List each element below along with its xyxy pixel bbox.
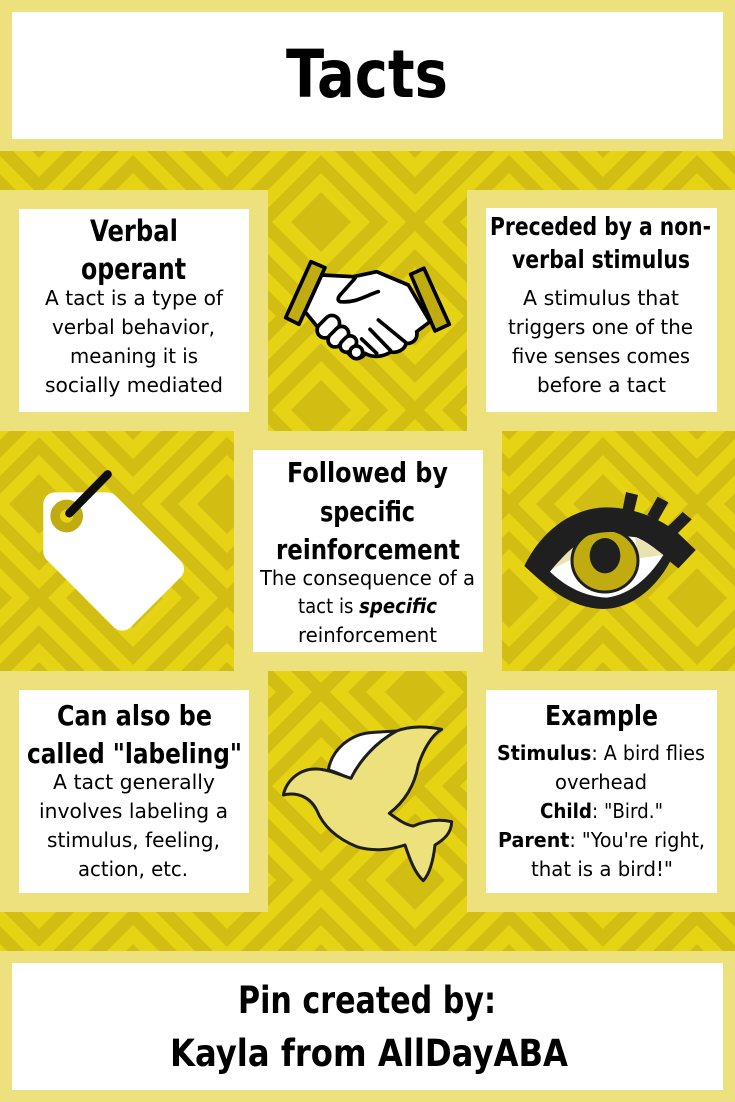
text: followed description: [259, 566, 475, 647]
heading: verbal operant: operant: [81, 252, 186, 286]
heading: example: Example: [545, 699, 658, 732]
heading: verbal operant: Verbal: [90, 214, 178, 248]
text: followed description: tact is specific: [298, 594, 437, 618]
icon: price tag: [50, 474, 172, 619]
text: preceded description: [508, 286, 693, 397]
text: verbal operant description: meaning it is: [70, 344, 198, 368]
text: followed description: reinforcement: [298, 623, 437, 647]
text: verbal operant description: verbal behavior,: [52, 315, 215, 339]
title: Tacts: [286, 36, 448, 113]
text: example dialogue: Stimulus: A bird flies: [497, 741, 705, 765]
text: example dialogue: that is a bird!": [531, 857, 673, 881]
heading: preceded by a non-verbal stimulus: [490, 212, 711, 274]
icon: bird: [283, 727, 452, 881]
heading: followed by specific reinforcement: [276, 456, 460, 566]
panel: followed by specific reinforcement: [234, 431, 502, 671]
panel: example: [467, 671, 735, 912]
text: labeling description: A tact generally: [53, 770, 215, 794]
text: followed description: The consequence of a: [259, 566, 475, 590]
heading: can also be called labeling: Can also be: [57, 699, 212, 732]
text: labeling description: involves labeling a: [39, 799, 228, 823]
icon: handshake: [286, 262, 449, 359]
panel: preceded by a non-verbal stimulus: [467, 190, 735, 431]
footer credit text: Kayla from AllDayABA: [170, 1032, 568, 1075]
footer credit text: Pin created by:: [238, 979, 496, 1022]
heading: can also be called labeling: called "labeling": [27, 737, 242, 770]
text: verbal operant description: A tact is a type of: [45, 286, 224, 310]
text: labeling description: action, etc.: [78, 857, 188, 881]
text: example dialogue: Child: "Bird.": [540, 799, 663, 823]
heading: verbal operant: [81, 214, 186, 286]
text: preceded description: triggers one of the: [508, 315, 693, 339]
text: example dialogue: Parent: "You're right,: [498, 828, 705, 852]
text: example dialogue: overhead: [555, 770, 647, 794]
heading: followed by specific reinforcement: specific: [320, 495, 415, 528]
heading: followed by specific reinforcement: Followed by: [287, 456, 448, 489]
footer credit text: [170, 979, 568, 1075]
text: preceded description: A stimulus that: [523, 286, 679, 310]
heading: followed by specific reinforcement: reinforcement: [276, 533, 460, 566]
text: example dialogue: [497, 741, 705, 881]
text: labeling description: stimulus, feeling,: [47, 828, 220, 852]
heading: can also be called labeling: [27, 699, 242, 770]
text: labeling description: [39, 770, 228, 881]
text: verbal operant description: socially mediated: [45, 373, 223, 397]
icon: eye: [524, 492, 696, 609]
text: preceded description: before a tact: [537, 373, 666, 397]
title panel: [12, 12, 723, 139]
text: verbal operant description: [45, 286, 224, 397]
text: preceded description: five senses comes: [512, 344, 690, 368]
panel: verbal operant: [0, 190, 268, 431]
panel: can also be called labeling: [0, 671, 268, 912]
footer panel: [12, 963, 723, 1090]
heading: preceded by a non-verbal stimulus: verbal stimulus: [512, 245, 690, 274]
